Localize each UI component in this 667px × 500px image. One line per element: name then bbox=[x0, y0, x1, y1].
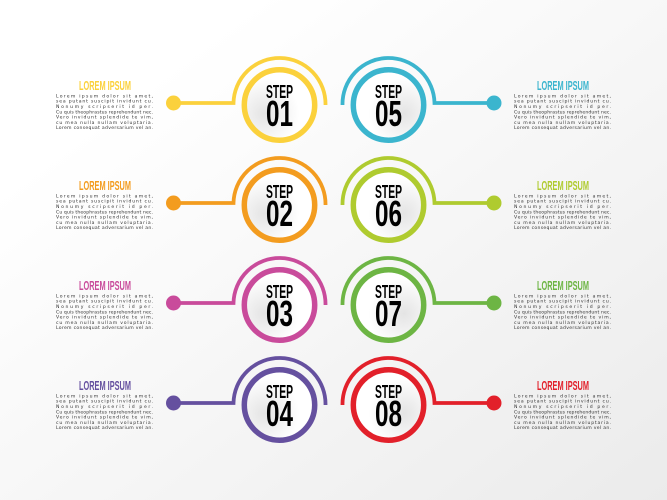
text block: step 08: Vero invidunt splendide te vim, bbox=[514, 415, 612, 421]
text block: step 07: cu mea nulla nullam voluptaria. bbox=[514, 320, 611, 326]
text block: step 05: sea putant suscipit invidunt cu. bbox=[514, 99, 611, 105]
text block: step 02: Lorem consequat adversarium vel an. bbox=[56, 225, 153, 231]
text block: step 06: cu mea nulla nullam voluptaria. bbox=[514, 220, 611, 226]
connector and arc: step 05 bbox=[342, 58, 494, 105]
text block: step 07: sea putant suscipit invidunt cu. bbox=[514, 299, 611, 305]
label: step 08: 08 bbox=[375, 393, 402, 434]
label: step 04: 04 bbox=[266, 393, 293, 434]
dot: step 08 bbox=[486, 396, 502, 410]
step 01 bbox=[56, 58, 326, 140]
label: step 07: STEP bbox=[375, 282, 402, 302]
text block: step 05: Cu quis theophrastus reprehendunt nec. bbox=[514, 109, 611, 115]
text block: step 05: Lorem consequat adversarium vel an. bbox=[514, 125, 611, 131]
text block: step 07: Cu quis theophrastus reprehendunt nec. bbox=[514, 309, 611, 315]
label: step 03: 03 bbox=[266, 293, 293, 334]
heading: step 07: LOREM IPSUM bbox=[537, 278, 589, 293]
text block: step 08: Lorem ipsum dolor sit amet, bbox=[514, 393, 612, 399]
dot: step 01 bbox=[166, 96, 181, 110]
text block: step 02: Nonumy scripserit id per. bbox=[56, 204, 153, 210]
text block: step 08: Lorem consequat adversarium vel an. bbox=[514, 425, 611, 431]
connector and arc: step 06 bbox=[342, 158, 494, 205]
text block: step 02: Vero invidunt splendide te vim, bbox=[56, 215, 154, 221]
label: step 06 bbox=[375, 182, 402, 234]
connector and arc: step 01 bbox=[174, 58, 326, 105]
text block: step 08: Cu quis theophrastus reprehendunt nec. bbox=[514, 409, 611, 415]
text block: step 03: Lorem consequat adversarium vel an. bbox=[56, 325, 153, 331]
connector and arc: step 07 bbox=[342, 258, 494, 305]
text block: step 01: cu mea nulla nullam voluptaria. bbox=[56, 120, 153, 126]
text block: step 04: cu mea nulla nullam voluptaria. bbox=[56, 420, 153, 426]
dot: step 06 bbox=[486, 196, 502, 210]
text block: step 04: Lorem ipsum dolor sit amet, bbox=[56, 393, 154, 399]
connector and arc: step 02 bbox=[174, 158, 326, 205]
text block: step 05: Nonumy scripserit id per. bbox=[514, 104, 611, 110]
text block: step 03: Lorem ipsum dolor sit amet, bbox=[56, 293, 154, 299]
label: step 01 bbox=[266, 82, 293, 134]
text block: step 05: Lorem ipsum dolor sit amet, bbox=[514, 93, 612, 99]
label: step 08 bbox=[375, 382, 402, 434]
label: step 08: STEP bbox=[375, 382, 402, 402]
dot: step 02 bbox=[166, 196, 181, 210]
text block: step 06: Nonumy scripserit id per. bbox=[514, 204, 611, 210]
text block: step 03: sea putant suscipit invidunt cu. bbox=[56, 299, 153, 305]
ring: step 02 bbox=[244, 170, 315, 240]
ring: step 05 bbox=[353, 70, 424, 140]
ring: step 01 bbox=[244, 70, 315, 140]
heading: step 01: LOREM IPSUM bbox=[79, 78, 131, 93]
text block: step 03: cu mea nulla nullam voluptaria. bbox=[56, 320, 153, 326]
text block: step 08 bbox=[514, 393, 612, 431]
heading: step 05: LOREM IPSUM bbox=[537, 78, 589, 93]
label: step 04: STEP bbox=[266, 382, 293, 402]
text block: step 06 bbox=[514, 193, 612, 231]
text block: step 04: sea putant suscipit invidunt cu. bbox=[56, 399, 153, 405]
text block: step 01: Nonumy scripserit id per. bbox=[56, 104, 153, 110]
text block: step 03: Vero invidunt splendide te vim, bbox=[56, 315, 154, 321]
text block: step 02: Lorem ipsum dolor sit amet, bbox=[56, 193, 154, 199]
ring: step 03 bbox=[244, 270, 315, 340]
step 07 bbox=[342, 258, 612, 340]
label: step 06: STEP bbox=[375, 182, 402, 202]
text block: step 08: cu mea nulla nullam voluptaria. bbox=[514, 420, 611, 426]
label: step 02 bbox=[266, 182, 293, 234]
label: step 03: STEP bbox=[266, 282, 293, 302]
text block: step 02 bbox=[56, 193, 154, 231]
text block: step 04: Vero invidunt splendide te vim, bbox=[56, 415, 154, 421]
text block: step 01: Cu quis theophrastus reprehendunt nec. bbox=[56, 109, 153, 115]
step 02 bbox=[56, 158, 326, 240]
text block: step 06: sea putant suscipit invidunt cu. bbox=[514, 199, 611, 205]
heading: step 06: LOREM IPSUM bbox=[537, 178, 589, 193]
text block: step 01: Vero invidunt splendide te vim, bbox=[56, 115, 154, 121]
text block: step 01: Lorem ipsum dolor sit amet, bbox=[56, 93, 154, 99]
heading: step 08: LOREM IPSUM bbox=[537, 378, 589, 393]
text block: step 05 bbox=[514, 93, 612, 131]
label: step 02: STEP bbox=[266, 182, 293, 202]
step 06 bbox=[342, 158, 612, 240]
ring: step 08 bbox=[353, 370, 424, 440]
dot: step 07 bbox=[486, 296, 502, 310]
text block: step 01: sea putant suscipit invidunt cu. bbox=[56, 99, 153, 105]
text block: step 03: Nonumy scripserit id per. bbox=[56, 304, 153, 310]
text block: step 04: Lorem consequat adversarium vel an. bbox=[56, 425, 153, 431]
text block: step 07: Nonumy scripserit id per. bbox=[514, 304, 611, 310]
label: step 05: STEP bbox=[375, 82, 402, 102]
text block: step 01 bbox=[56, 93, 154, 131]
label: step 02: 02 bbox=[266, 193, 293, 234]
label: step 03 bbox=[266, 282, 293, 334]
text block: step 06: Cu quis theophrastus reprehendunt nec. bbox=[514, 209, 611, 215]
label: step 05 bbox=[375, 82, 402, 134]
text block: step 07 bbox=[514, 293, 612, 331]
text block: step 04: Nonumy scripserit id per. bbox=[56, 404, 153, 410]
label: step 01: 01 bbox=[266, 93, 293, 134]
text block: step 07: Lorem consequat adversarium vel an. bbox=[514, 325, 611, 331]
dot: step 05 bbox=[486, 96, 502, 110]
connector and arc: step 03 bbox=[174, 258, 326, 305]
step 08 bbox=[342, 358, 612, 440]
text block: step 04 bbox=[56, 393, 154, 431]
ring: step 06 bbox=[353, 170, 424, 240]
text block: step 08: Nonumy scripserit id per. bbox=[514, 404, 611, 410]
ring: step 04 bbox=[244, 370, 315, 440]
text block: step 07: Vero invidunt splendide te vim, bbox=[514, 315, 612, 321]
step 05 bbox=[342, 58, 612, 140]
heading: step 04: LOREM IPSUM bbox=[79, 378, 131, 393]
label: step 07: 07 bbox=[375, 293, 402, 334]
label: step 06: 06 bbox=[375, 193, 402, 234]
text block: step 04: Cu quis theophrastus reprehendunt nec. bbox=[56, 409, 153, 415]
heading: step 02: LOREM IPSUM bbox=[79, 178, 131, 193]
connector and arc: step 04 bbox=[174, 358, 326, 405]
text block: step 03 bbox=[56, 293, 154, 331]
connector and arc: step 08 bbox=[342, 358, 494, 405]
label: step 04 bbox=[266, 382, 293, 434]
text block: step 07: Lorem ipsum dolor sit amet, bbox=[514, 293, 612, 299]
dot: step 04 bbox=[166, 396, 181, 410]
label: step 01: STEP bbox=[266, 82, 293, 102]
step 04 bbox=[56, 358, 326, 440]
dot: step 03 bbox=[166, 296, 181, 310]
text block: step 08: sea putant suscipit invidunt cu. bbox=[514, 399, 611, 405]
step 03 bbox=[56, 258, 326, 340]
text block: step 01: Lorem consequat adversarium vel an. bbox=[56, 125, 153, 131]
text block: step 05: Vero invidunt splendide te vim, bbox=[514, 115, 612, 121]
heading: step 03: LOREM IPSUM bbox=[79, 278, 131, 293]
text block: step 02: Cu quis theophrastus reprehendunt nec. bbox=[56, 209, 153, 215]
label: step 07 bbox=[375, 282, 402, 334]
text block: step 06: Lorem consequat adversarium vel an. bbox=[514, 225, 611, 231]
text block: step 06: Vero invidunt splendide te vim, bbox=[514, 215, 612, 221]
text block: step 05: cu mea nulla nullam voluptaria. bbox=[514, 120, 611, 126]
text block: step 06: Lorem ipsum dolor sit amet, bbox=[514, 193, 612, 199]
text block: step 03: Cu quis theophrastus reprehendunt nec. bbox=[56, 309, 153, 315]
text block: step 02: cu mea nulla nullam voluptaria. bbox=[56, 220, 153, 226]
text block: step 02: sea putant suscipit invidunt cu. bbox=[56, 199, 153, 205]
label: step 05: 05 bbox=[375, 93, 402, 134]
ring: step 07 bbox=[353, 270, 424, 340]
